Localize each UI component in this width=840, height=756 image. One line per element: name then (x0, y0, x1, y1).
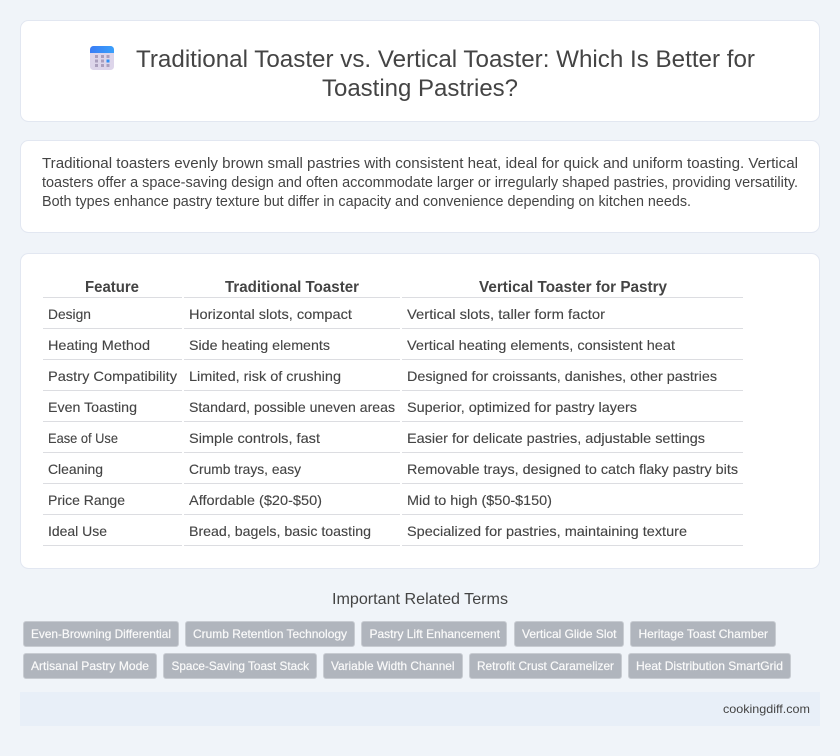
row: Price Range: Price Range (48, 492, 125, 508)
row: Cleaning (43, 461, 743, 484)
row: Even Toasting: Standard, possible uneven areas (189, 399, 395, 415)
tag (24, 622, 178, 646)
row: Ease of Use: Easier for delicate pastries, adjustable settings (407, 430, 705, 446)
row: Ideal Use: Ideal Use (48, 523, 107, 539)
tag: Retrofit Crust Caramelizer (477, 659, 614, 673)
row: Cleaning: Removable trays, designed to catch flaky pastry bits (407, 461, 738, 477)
row: Design: Vertical slots, taller form factor (407, 306, 605, 322)
tag (24, 654, 156, 678)
tag: Heritage Toast Chamber (638, 627, 768, 641)
title: Traditional Toaster vs. Vertical Toaster: Which Is Better for (136, 46, 755, 73)
icon: calendar (90, 46, 114, 70)
row: Design (43, 306, 743, 329)
tag: Artisanal Pastry Mode (31, 659, 149, 673)
table header row: Vertical Toaster for Pastry (479, 279, 667, 296)
tag (186, 622, 354, 646)
tag (324, 654, 462, 678)
row: Ideal Use: Bread, bagels, basic toasting (189, 523, 371, 539)
tag (470, 654, 622, 678)
row: Heating Method: Side heating elements (189, 337, 330, 353)
tag: Vertical Glide Slot (522, 627, 617, 641)
row: Ease of Use: Ease of Use (48, 430, 118, 446)
row: Cleaning: Cleaning (48, 461, 103, 477)
row: Ideal Use: Specialized for pastries, maintaining texture (407, 523, 687, 539)
row: Price Range (43, 492, 743, 515)
panel: title card (20, 20, 820, 122)
tag: Crumb Retention Technology (193, 627, 347, 641)
heading: important related terms: Important Related Terms (332, 591, 508, 608)
summary text: toasters offer a space-saving design and often accommodate larger or irregularly shaped pastries, providing versatility. (42, 175, 798, 191)
row: Even Toasting: Even Toasting (48, 399, 137, 415)
tag (164, 654, 316, 678)
table header row (43, 279, 743, 298)
row: Ease of Use: Simple controls, fast (189, 430, 320, 446)
row: Even Toasting (43, 399, 743, 422)
tag: Heat Distribution SmartGrid (636, 659, 783, 673)
tag (628, 654, 790, 678)
row: Ideal Use (43, 523, 743, 546)
row: Price Range: Affordable ($20-$50) (189, 492, 322, 508)
summary text (42, 156, 798, 210)
footer bar (20, 692, 820, 726)
tag: Pastry Lift Enhancement (370, 627, 501, 641)
panel: comparison table (20, 254, 820, 568)
row: Cleaning: Crumb trays, easy (189, 461, 301, 477)
row: Heating Method: Heating Method (48, 337, 150, 353)
tag: Even-Browning Differential (31, 627, 171, 641)
tag (362, 622, 506, 646)
row: Ease of Use (43, 430, 743, 453)
footer bar: cookingdiff.com (723, 702, 810, 716)
title (136, 46, 755, 102)
row: Design: Horizontal slots, compact (189, 306, 352, 322)
tag: Space-Saving Toast Stack (172, 659, 310, 673)
tag: Variable Width Channel (331, 659, 454, 673)
row: Pastry Compatibility: Limited, risk of crushing (189, 368, 341, 384)
table header row: Traditional Toaster (225, 279, 359, 296)
related term tags (24, 622, 790, 678)
summary text: Traditional toasters evenly brown small pastries with consistent heat, ideal for quick and uniform toasting. Vertical (42, 156, 798, 172)
row: Pastry Compatibility: Designed for croissants, danishes, other pastries (407, 368, 717, 384)
title: Toasting Pastries? (322, 75, 518, 102)
summary text: Both types enhance pastry texture but differ in capacity and convenience depending on kitchen needs. (42, 194, 691, 210)
row: Pastry Compatibility: Pastry Compatibility (48, 368, 177, 384)
panel: summary paragraph (20, 140, 820, 232)
tag (630, 622, 776, 646)
row: Even Toasting: Superior, optimized for pastry layers (407, 399, 637, 415)
tag (514, 622, 624, 646)
row: Design: Design (48, 306, 91, 322)
row: Heating Method (43, 337, 743, 360)
row: Price Range: Mid to high ($50-$150) (407, 492, 552, 508)
table header row: Feature (85, 279, 139, 296)
row: Heating Method: Vertical heating elements, consistent heat (407, 337, 675, 353)
row: Pastry Compatibility (43, 368, 743, 391)
